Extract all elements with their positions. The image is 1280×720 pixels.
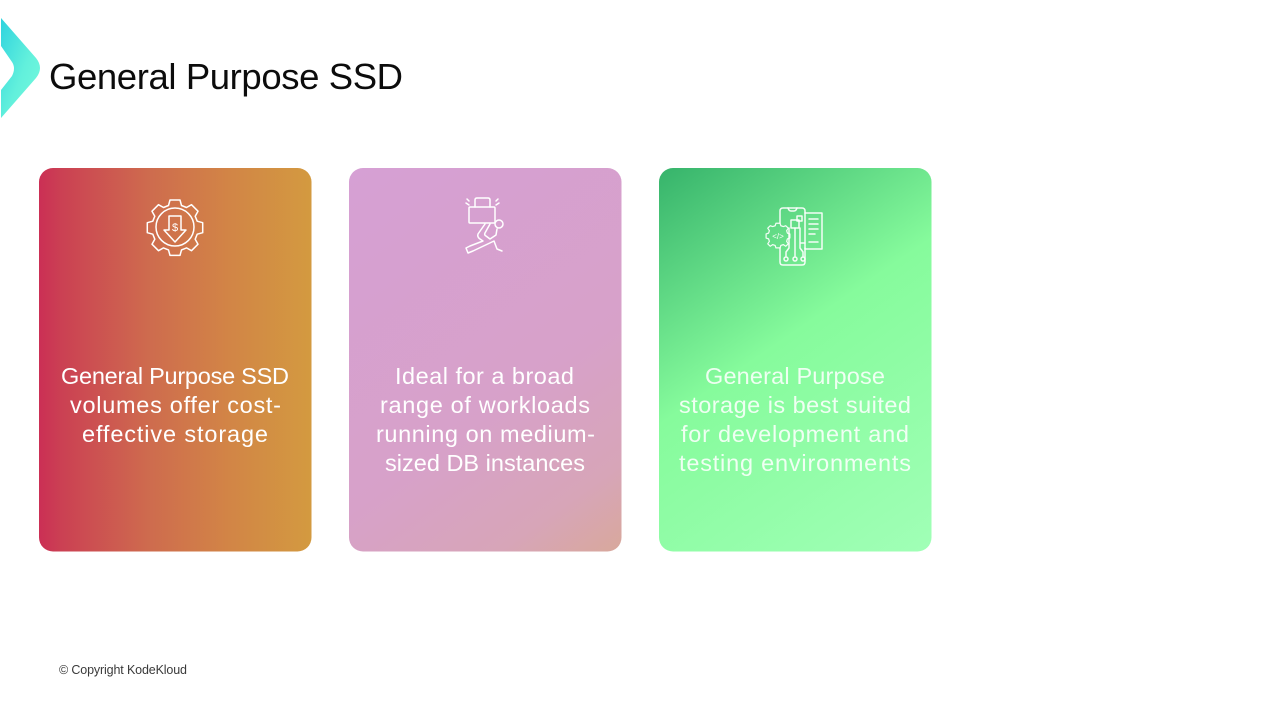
card text [679,363,911,476]
card text: for development and [681,421,909,447]
card text [61,363,289,447]
card text: testing environments [679,450,911,476]
panel: development and testing [659,168,932,552]
card text: Ideal for a broad [395,363,574,389]
title: General Purpose SSD [49,56,403,97]
card text: range of workloads [380,392,590,418]
card text: effective storage [82,421,268,447]
card text: General Purpose [705,363,885,389]
icon: gear with dollar down arrow [147,200,203,255]
logo chevron [1,18,40,118]
panel: cost-effective storage [39,168,312,552]
icon: phone with code gear and document: </> [772,232,784,241]
card text [376,363,595,476]
icon: gear with dollar down arrow: $ [172,222,178,234]
panel: broad workloads [349,168,622,552]
card text: sized DB instances [385,450,585,476]
card text: volumes offer cost- [70,392,281,418]
icon: person carrying heavy load [466,198,503,253]
icon: phone with code gear and document [766,208,822,265]
card text: storage is best suited [679,392,911,418]
footer copyright: © Copyright KodeKloud [59,663,187,677]
card text: running on medium- [376,421,595,447]
card text: General Purpose SSD [61,363,289,389]
